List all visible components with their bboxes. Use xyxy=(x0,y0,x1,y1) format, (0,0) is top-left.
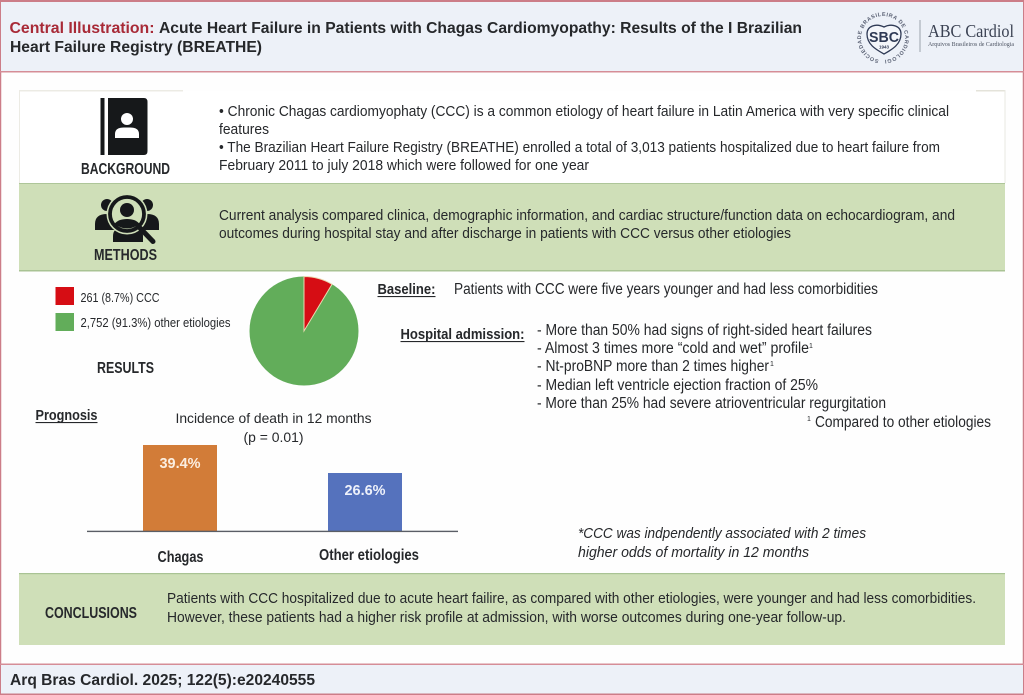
hospital admission xyxy=(400,322,991,431)
background text: features xyxy=(219,122,269,138)
legend: 261 (8.7%) CCC xyxy=(80,290,160,305)
bar chart: 39.4% xyxy=(160,456,201,472)
heading: methods: METHODS xyxy=(94,247,157,264)
icon: people with magnifier xyxy=(95,194,159,242)
title: Heart Failure Registry (BREATHE) xyxy=(10,39,262,56)
title: Central Illustration: xyxy=(10,20,154,37)
background text xyxy=(219,104,949,174)
panel: results xyxy=(36,276,991,566)
background text: • Chronic Chagas cardiomyophaty (CCC) is a common etiology of heart failure in Latin America with very specific clinical xyxy=(219,104,949,120)
footnote: Compared to other etiologies xyxy=(815,414,991,431)
admission list xyxy=(537,322,886,412)
heading: background: BACKGROUND xyxy=(81,161,170,178)
background text: • The Brazilian Heart Failure Registry (BREATHE) enrolled a total of 3,013 patients hospitalized due to heart failure from xyxy=(219,140,940,156)
admission list: - Almost 3 times more “cold and wet” profile xyxy=(537,340,809,357)
chart title: (p = 0.01) xyxy=(244,430,304,446)
citation: Arq Bras Cardiol. 2025; 122(5):e20240555 xyxy=(10,672,315,689)
methods text: outcomes during hospital stay and after discharge in patients with CCC versus other etiologies xyxy=(219,226,791,242)
baseline: Patients with CCC were five years younger and had less comorbidities xyxy=(454,281,878,298)
legend xyxy=(56,287,231,331)
chart title: Incidence of death in 12 months xyxy=(176,411,372,427)
logo: SBC xyxy=(857,12,909,64)
pie chart xyxy=(250,276,358,386)
logo: ABC Cardiol: ABC Cardiol xyxy=(928,21,1014,41)
footer band xyxy=(0,664,1024,695)
mortality note xyxy=(578,525,866,561)
admission list: - Median left ventricle ejection fraction of 25% xyxy=(537,377,818,394)
heading: prognosis: Prognosis xyxy=(36,407,98,424)
logo: SBC: 1943 xyxy=(879,44,890,50)
header band xyxy=(0,1,1024,72)
bar chart: Other etiologies xyxy=(319,547,419,564)
conclusions text: Patients with CCC hospitalized due to acute heart failire, as compared with other etiologies, were younger and had less comorbidities. xyxy=(167,591,976,607)
legend: 2,752 (91.3%) other etiologies xyxy=(80,315,231,330)
baseline: Baseline: xyxy=(378,281,436,298)
hospital admission: Hospital admission: xyxy=(400,326,524,343)
chart title xyxy=(176,411,372,446)
panel: conclusions xyxy=(19,573,1005,645)
heading: conclusions: CONCLUSIONS xyxy=(45,605,137,622)
bar chart: 26.6% xyxy=(344,483,386,499)
footnote: 1 xyxy=(807,416,811,423)
icon: address book xyxy=(100,98,148,155)
logo: SBC: SBC xyxy=(869,30,900,46)
background text: February 2011 to july 2018 which were followed for one year xyxy=(219,158,589,174)
bar chart xyxy=(87,445,458,566)
admission list: 1 xyxy=(809,343,813,350)
title: Acute Heart Failure in Patients with Chagas Cardiomyopathy: Results of the I Brazilian xyxy=(159,20,802,37)
methods text xyxy=(219,208,955,242)
admission list: - Nt-proBNP more than 2 times higher xyxy=(537,358,769,375)
admission list: 1 xyxy=(770,361,774,368)
logo: ABC Cardiol: Arquivos Brasileiros de Cardiologia xyxy=(928,41,1014,48)
panel: methods xyxy=(19,183,1005,272)
admission list: - More than 50% had signs of right-sided heart failures xyxy=(537,322,872,339)
bar chart: Chagas xyxy=(158,549,204,566)
conclusions text: However, these patients had a higher risk profile at admission, with worse outcomes during one-year follow-up. xyxy=(167,610,846,626)
conclusions text xyxy=(167,591,976,626)
methods text: Current analysis compared clinica, demographic information, and cardiac structure/function data on echocardiogram, and xyxy=(219,208,955,224)
mortality note: *CCC was indpendently associated with 2 times xyxy=(578,525,866,542)
panel: background xyxy=(19,90,1006,183)
logo divider xyxy=(920,20,921,52)
title xyxy=(10,20,802,56)
mortality note: higher odds of mortality in 12 months xyxy=(578,544,809,561)
admission list: - More than 25% had severe atrioventricular regurgitation xyxy=(537,395,886,412)
heading: results: RESULTS xyxy=(97,360,154,377)
